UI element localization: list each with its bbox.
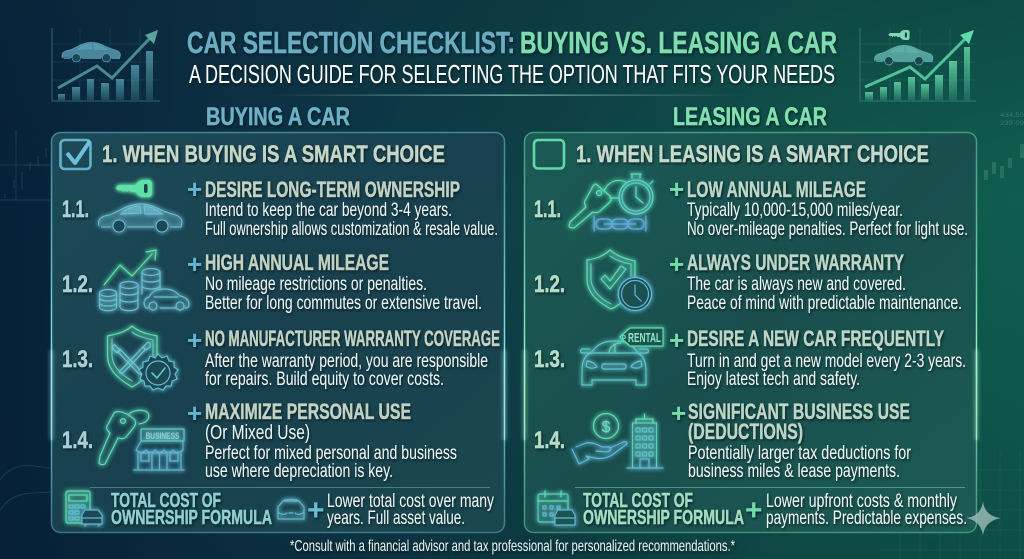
- icon: left header chart with car: [52, 28, 160, 101]
- item 1.1: LOW ANNUAL MILEAGE: [687, 177, 866, 202]
- item 1.2: [62, 249, 482, 314]
- item 1.2: 1.2.: [534, 271, 565, 298]
- footer: total cost of ownership: TOTAL COST OF: [583, 490, 693, 512]
- item 1.4: $: [602, 419, 611, 436]
- item 1.1: [534, 174, 968, 240]
- item 1.2: No mileage restrictions or penalties.: [205, 274, 427, 295]
- icon: right header chart with key and car: [860, 28, 976, 101]
- item 1.2: [534, 249, 962, 314]
- item 1.4: business miles & lease payments.: [688, 461, 900, 482]
- item 1.1: DESIRE LONG-TERM OWNERSHIP: [205, 177, 460, 202]
- title: [187, 25, 837, 60]
- panel: buying a car: [52, 132, 504, 532]
- title: CAR SELECTION CHECKLIST:: [187, 25, 515, 60]
- icon: checked box: [60, 140, 90, 169]
- panel: leasing a car: [524, 132, 976, 532]
- item 1.3: RENTAL: [628, 331, 661, 345]
- item 1.2: The car is always new and covered.: [687, 274, 906, 295]
- item 1.4: [62, 398, 457, 482]
- item 1.2: HIGH ANNUAL MILEAGE: [205, 250, 389, 275]
- item 1.4: SIGNIFICANT BUSINESS USE: [688, 399, 910, 424]
- item 1.2: Better for long commutes or extensive travel.: [205, 293, 482, 314]
- item 1.1: [62, 174, 498, 240]
- background: 434,50: [1000, 113, 1024, 119]
- item 1.4: 1.4.: [62, 427, 93, 454]
- item 1.4: +: [671, 398, 686, 428]
- item 1.2: ALWAYS UNDER WARRANTY: [687, 250, 904, 275]
- item 1.4: Perfect for mixed personal and business: [205, 443, 457, 464]
- item 1.3: +: [187, 325, 202, 355]
- footer: total cost of ownership: Lower upfront costs & monthly: [766, 491, 957, 512]
- footer: total cost of ownership: [538, 490, 967, 529]
- item 1.4: +: [187, 398, 202, 428]
- footer: total cost of ownership: +: [745, 494, 763, 527]
- title: BUYING VS. LEASING A CAR: [520, 25, 837, 60]
- item 1.3: [534, 325, 966, 390]
- item 1.4: (DEDUCTIONS): [688, 419, 803, 444]
- item 1.1: +: [187, 174, 202, 204]
- item 1.1: +: [669, 174, 684, 204]
- heading: leasing a car: LEASING A CAR: [673, 103, 827, 131]
- item 1.2: +: [669, 249, 684, 279]
- item 1.3: 1.3.: [62, 346, 93, 373]
- item 1.1: Typically 10,000-15,000 miles/year.: [687, 200, 903, 221]
- footer: total cost of ownership: OWNERSHIP FORMULA: [583, 507, 744, 529]
- item 1.4: Potentially larger tax deductions for: [688, 443, 911, 464]
- item 1.3: [62, 325, 500, 390]
- item 1.3: After the warranty period, you are responsible: [205, 351, 488, 372]
- item 1.3: Enjoy latest tech and safety.: [687, 369, 860, 390]
- footer: total cost of ownership: OWNERSHIP FORMULA: [111, 507, 272, 529]
- item 1.2: 1.2.: [62, 271, 93, 298]
- item 1.4: (Or Mixed Use): [205, 422, 310, 444]
- item 1.3: +: [669, 325, 684, 355]
- item 1.1: Intend to keep the car beyond 3-4 years.: [205, 200, 452, 221]
- background: 239`09: [1000, 121, 1024, 127]
- item 1.3: for repairs. Build equity to cover costs.: [205, 369, 444, 390]
- item 1.4: MAXIMIZE PERSONAL USE: [205, 399, 411, 424]
- panel heading: 1. WHEN LEASING IS A SMART CHOICE: [576, 141, 929, 168]
- item 1.4: BUSINESS: [146, 431, 180, 442]
- panel heading: 1. WHEN BUYING IS A SMART CHOICE: [102, 141, 445, 168]
- item 1.4: [534, 398, 911, 482]
- icon: empty checkbox: [534, 140, 564, 168]
- item 1.1: 1.1.: [534, 196, 561, 223]
- footer: total cost of ownership: +: [307, 494, 325, 527]
- footer: total cost of ownership: [66, 490, 494, 529]
- item 1.1: Full ownership allows customization & resale value.: [205, 219, 498, 240]
- item 1.4: use where depreciation is key.: [205, 461, 393, 482]
- icon: sparkle star: [966, 501, 1001, 536]
- header divider: [267, 94, 747, 96]
- footer: total cost of ownership: TOTAL COST OF: [111, 490, 221, 512]
- footer: total cost of ownership: Lower total cost over many: [327, 491, 494, 512]
- footer: total cost of ownership: years. Full asset value.: [327, 508, 465, 529]
- item 1.4: 1.4.: [534, 427, 565, 454]
- footnote: *Consult with a financial advisor and tax professional for personalized recommendations.*: [290, 538, 735, 555]
- item 1.2: +: [187, 249, 202, 279]
- item 1.1: 1.1.: [62, 196, 89, 223]
- heading: buying a car: BUYING A CAR: [206, 103, 350, 131]
- item 1.3: NO MANUFACTURER WARRANTY COVERAGE: [205, 326, 500, 351]
- item 1.3: 1.3.: [534, 346, 565, 373]
